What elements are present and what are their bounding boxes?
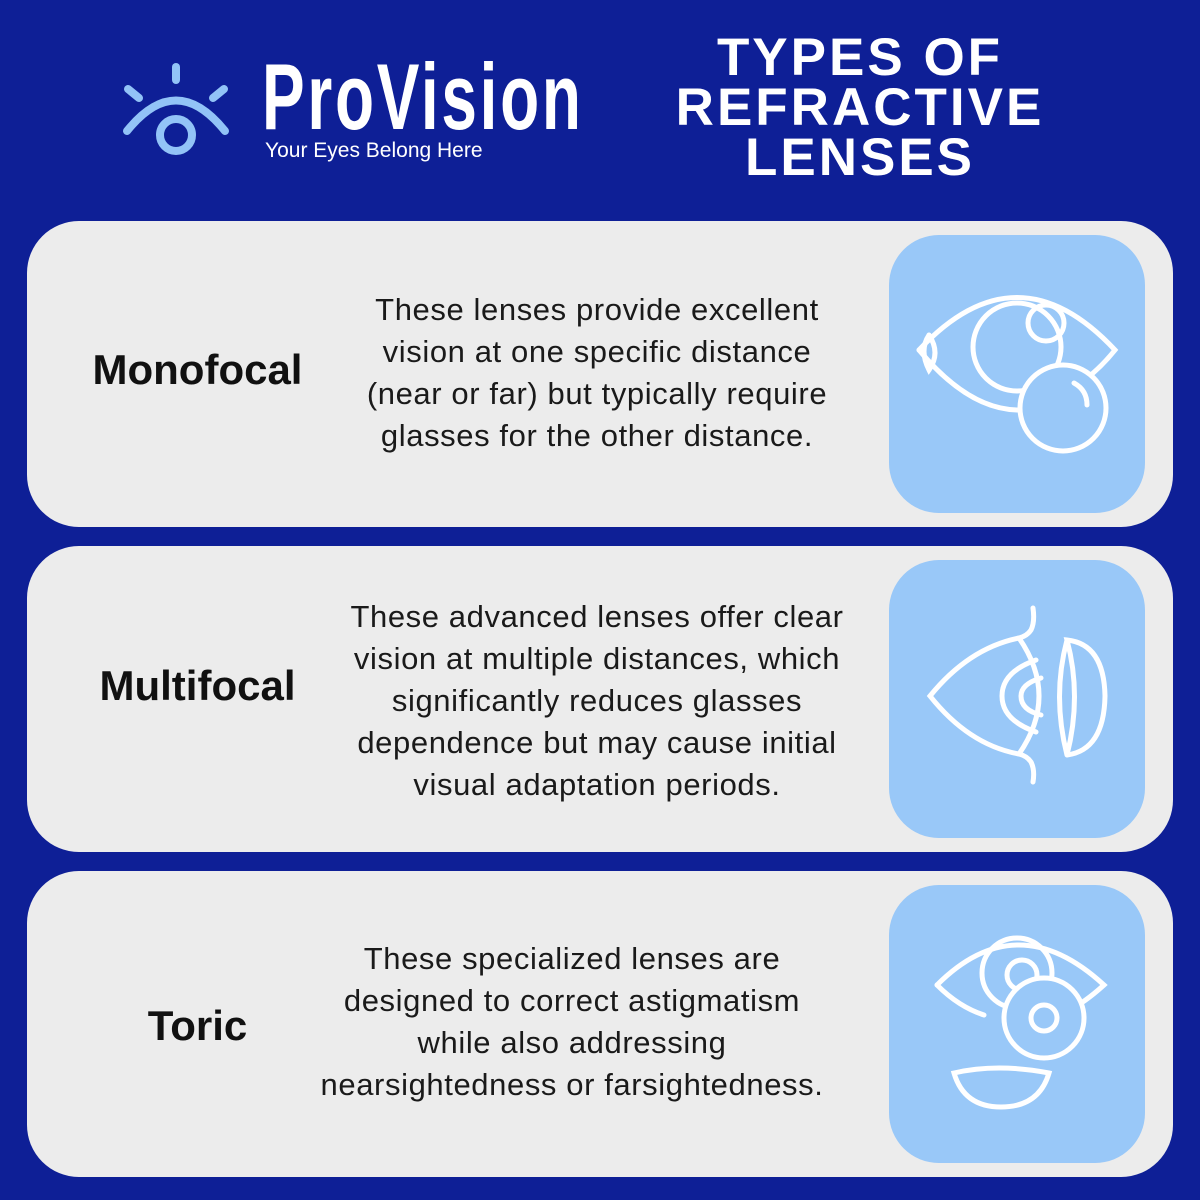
text: monofocal description: vision at one specific distance bbox=[383, 334, 811, 369]
title: REFRACTIVE bbox=[676, 78, 1044, 137]
text: multifocal description: dependence but may cause initial bbox=[357, 725, 837, 760]
text: toric description: while also addressing bbox=[418, 1025, 726, 1060]
heading: Toric: Toric bbox=[148, 1002, 247, 1049]
text: monofocal description: (near or far) but typically require bbox=[367, 376, 827, 411]
text: monofocal description: These lenses provide excellent bbox=[375, 292, 819, 327]
text: multifocal description: vision at multiple distances, which bbox=[354, 641, 840, 676]
panel: toric bbox=[27, 871, 1173, 1177]
panel: multifocal bbox=[27, 546, 1173, 852]
text: multifocal description: visual adaptation periods. bbox=[413, 767, 781, 802]
tagline: Your Eyes Belong Here bbox=[265, 139, 483, 162]
title: LENSES bbox=[745, 128, 975, 187]
title: TYPES OF bbox=[717, 28, 1003, 87]
logo bbox=[123, 44, 584, 162]
text: multifocal description: significantly reduces glasses bbox=[392, 683, 802, 718]
text: monofocal description bbox=[367, 292, 827, 453]
icon: eye side with contact lens bbox=[889, 560, 1145, 838]
heading: Multifocal: Multifocal bbox=[100, 662, 296, 709]
icon: logo eye bbox=[123, 63, 229, 155]
brand name: ProVision bbox=[262, 44, 584, 149]
panel: monofocal bbox=[27, 221, 1173, 527]
text: multifocal description: These advanced lenses offer clear bbox=[350, 599, 844, 634]
text: toric description: nearsightedness or farsightedness. bbox=[321, 1067, 823, 1102]
text: monofocal description: glasses for the other distance. bbox=[381, 418, 813, 453]
heading: Monofocal: Monofocal bbox=[92, 346, 302, 393]
text: multifocal description bbox=[350, 599, 844, 802]
icon: eye with lens bbox=[889, 235, 1145, 513]
text: toric description: designed to correct astigmatism bbox=[344, 983, 800, 1018]
text: toric description: These specialized lenses are bbox=[364, 941, 780, 976]
title bbox=[676, 28, 1044, 187]
text: toric description bbox=[321, 941, 823, 1102]
icon: eye with toric lens bbox=[889, 885, 1145, 1163]
